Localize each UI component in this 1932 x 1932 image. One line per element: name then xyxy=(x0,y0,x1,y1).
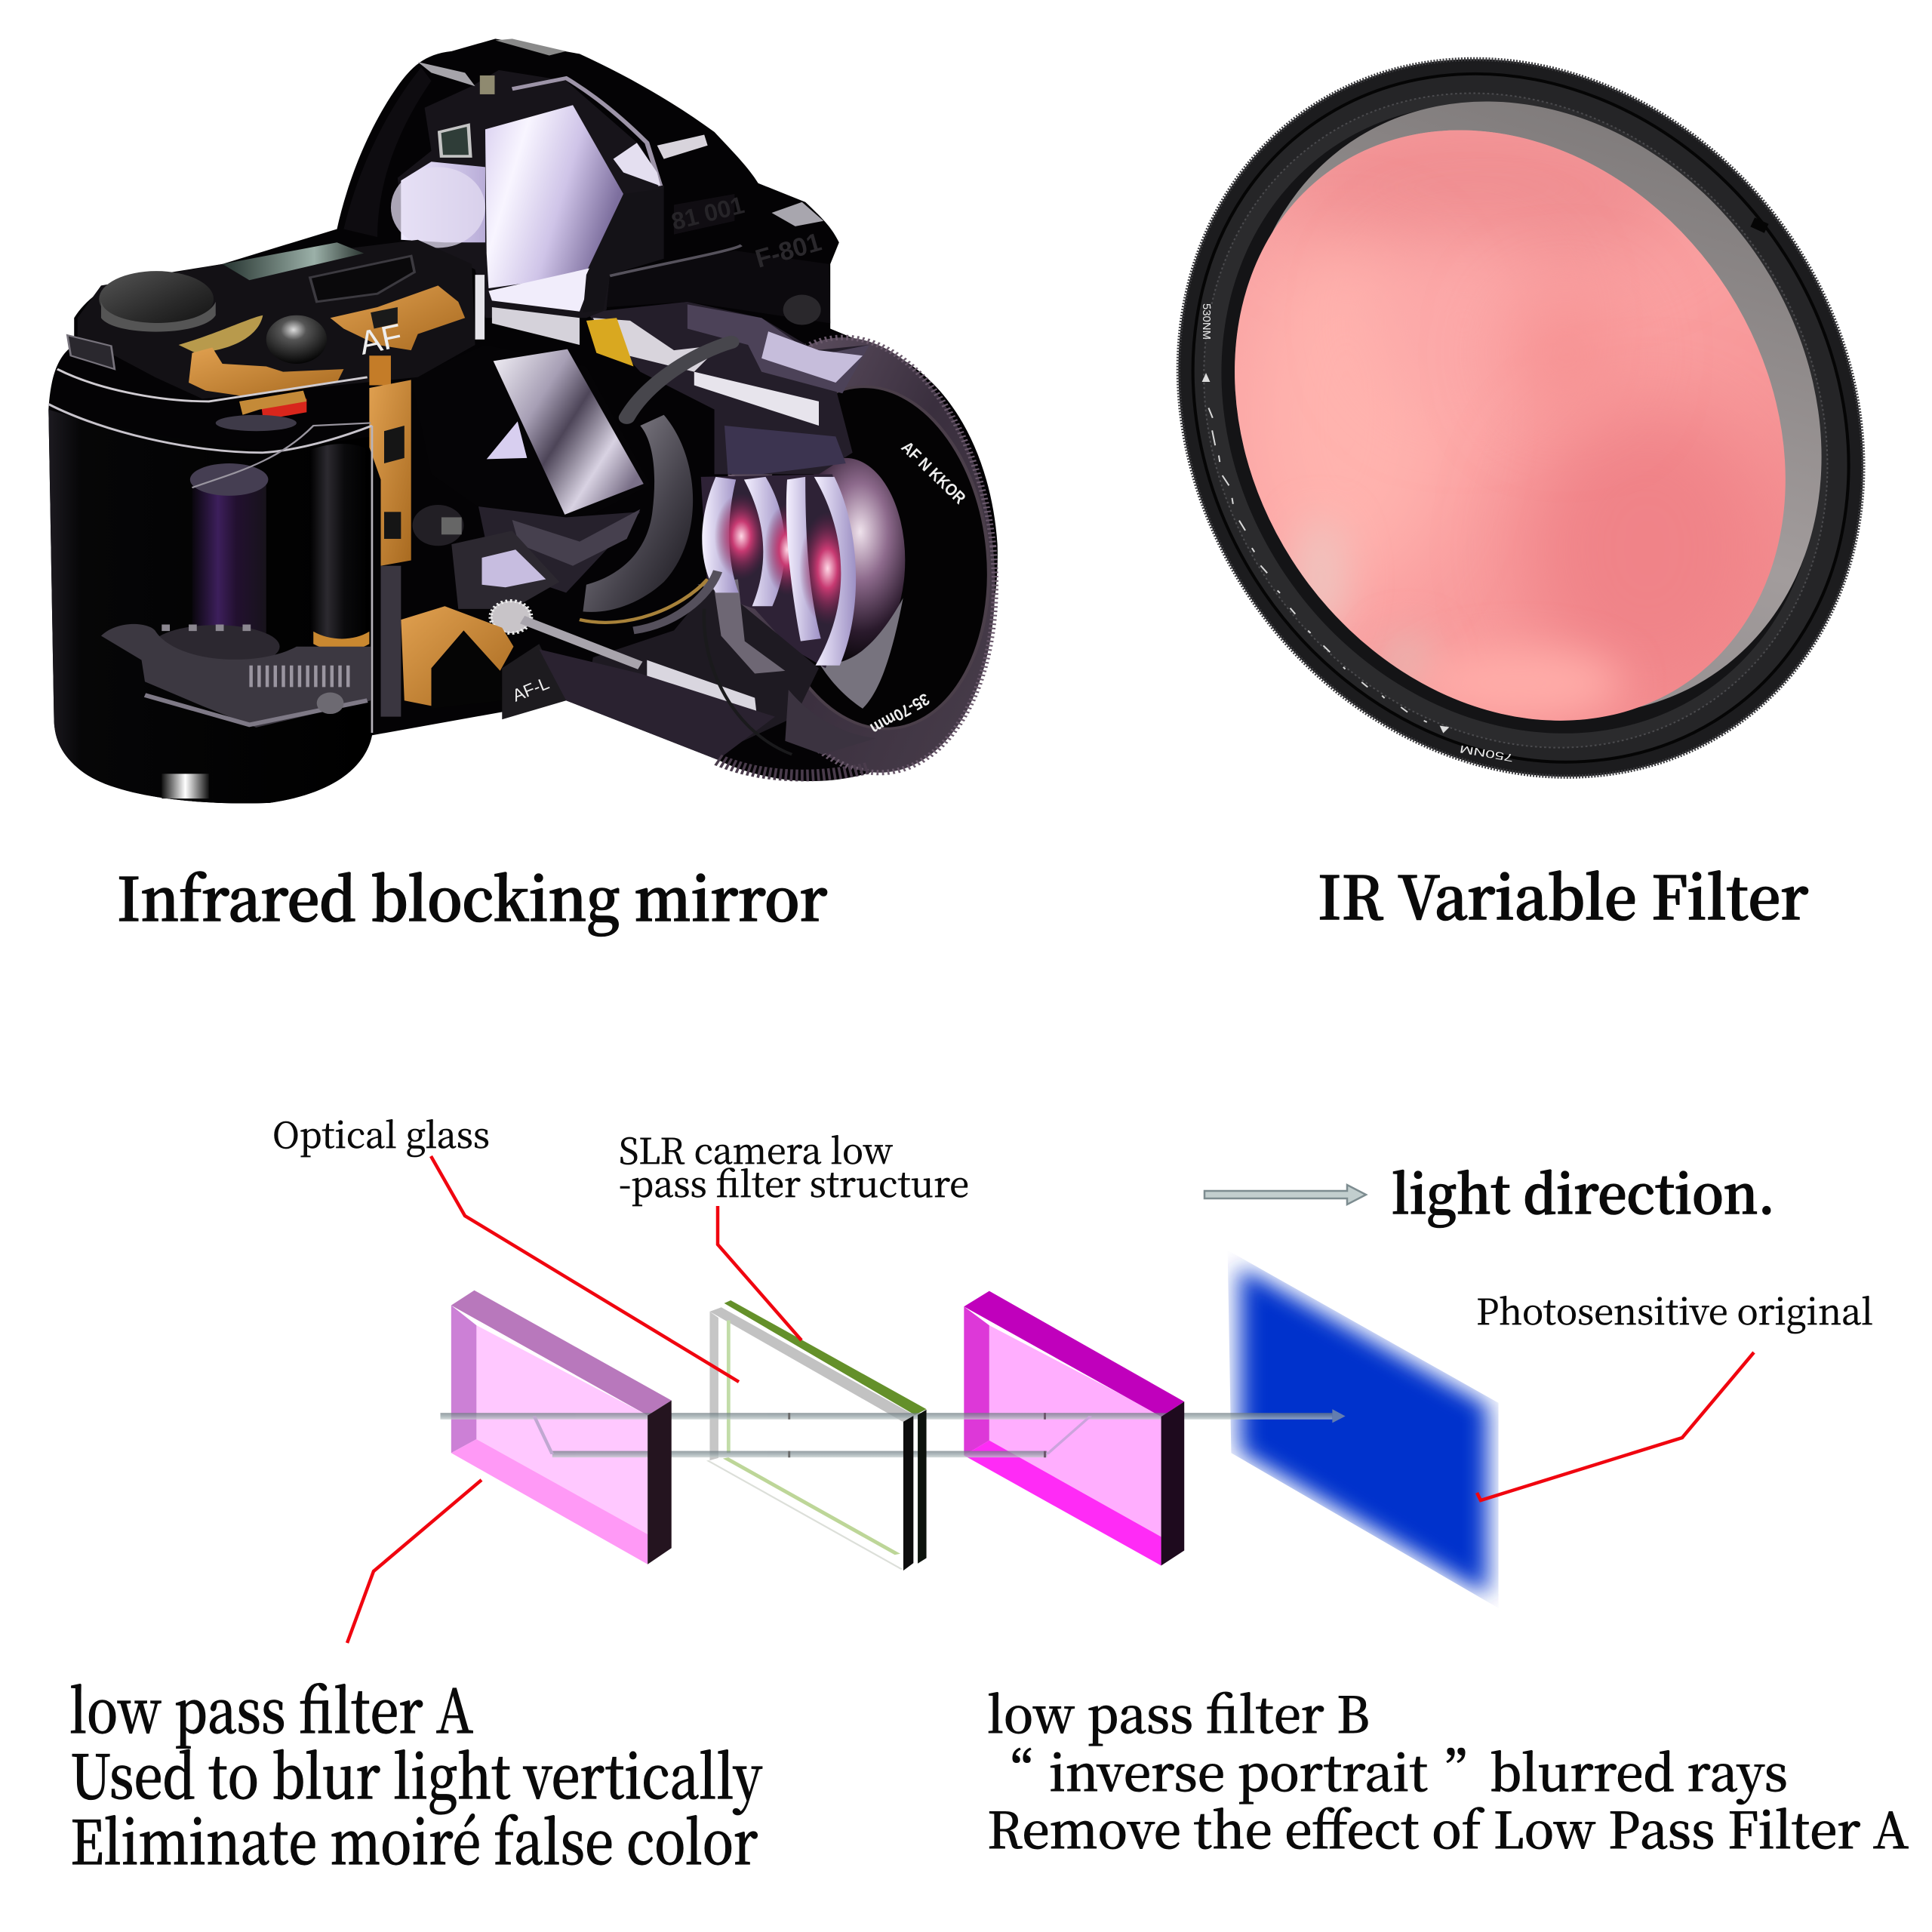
centre light tone xyxy=(1443,237,1511,295)
mirror box lower parts xyxy=(478,506,640,592)
leader: photosensitive original xyxy=(1477,1352,1754,1500)
prism underside xyxy=(492,307,580,345)
low pass filter A xyxy=(451,1291,672,1564)
lens element 4 xyxy=(814,477,856,666)
camera cutaway illustration xyxy=(48,38,1017,804)
filter marking: 530NM: 530NM xyxy=(1200,303,1213,340)
AF pad orange stem xyxy=(369,355,391,386)
white barrel strip left xyxy=(593,318,721,372)
lens element 2 xyxy=(744,477,785,606)
lens element 1 xyxy=(702,477,739,592)
ray arrow head xyxy=(1332,1409,1346,1423)
glass base xyxy=(1235,130,1786,721)
white barrel strip lower xyxy=(647,660,758,728)
heading: IR variable filter: IR Variable Filter xyxy=(1318,851,1808,937)
left dark hump shading xyxy=(343,67,432,237)
low pass filter structure diagram xyxy=(440,1266,1487,1595)
white vertical strip xyxy=(475,275,485,340)
caption: low pass filter A: Used to blur light vertically xyxy=(70,1729,762,1816)
caption: low pass filter B: low pass filter B xyxy=(987,1675,1370,1747)
filter B face xyxy=(989,1325,1161,1537)
knob on front xyxy=(413,505,463,546)
label: photosensitive original: Photosensitive original xyxy=(1476,1284,1873,1335)
camera text: AF-L: AF-L xyxy=(509,673,552,706)
pink glow 3 xyxy=(799,512,856,625)
strip black chips xyxy=(384,426,405,463)
sensor lavender xyxy=(481,549,546,587)
camera body silhouette xyxy=(48,38,998,804)
inner dark ring xyxy=(1103,0,1932,844)
photosensitive original xyxy=(1240,1266,1487,1595)
shoe screw xyxy=(480,75,494,94)
lens front black ring xyxy=(747,380,1003,735)
grip arc lines xyxy=(48,405,372,453)
light rays xyxy=(440,1409,1346,1457)
body top shoulder xyxy=(607,251,830,323)
silver rod xyxy=(522,620,640,666)
black arc band xyxy=(626,342,731,417)
yellow lens contact xyxy=(586,318,633,367)
black on PCB chip xyxy=(371,307,398,329)
filter A left edge xyxy=(451,1306,476,1453)
glass grey top edge xyxy=(709,1307,915,1422)
lower right dark tone xyxy=(1525,408,1770,688)
black arrow on pcb xyxy=(432,632,502,709)
eyepiece bulge xyxy=(391,167,485,248)
mirror box gray step xyxy=(512,509,640,566)
glass left edge xyxy=(709,1312,718,1460)
orange ring on cylinder xyxy=(313,632,369,651)
lower band xyxy=(785,690,876,755)
label: SLR camera low-pass filter structure: SLR camera low xyxy=(619,1124,894,1174)
outer black ring xyxy=(1042,0,1932,904)
vertical hairline xyxy=(371,426,373,733)
dial xyxy=(99,271,214,327)
upper lens barrel cutaway xyxy=(586,302,869,474)
lower mount gold arc xyxy=(580,580,708,623)
hot shoe xyxy=(495,38,566,56)
low pass filter B xyxy=(964,1291,1184,1565)
lower ray xyxy=(552,1451,1047,1457)
black battery cylinder xyxy=(310,444,368,652)
pink glass xyxy=(1235,130,1786,721)
label: light direction: light direction. xyxy=(1392,1152,1775,1229)
tertiary ring xyxy=(1080,0,1932,863)
glass left green line xyxy=(727,1320,731,1453)
white barrel strip xyxy=(694,372,819,426)
rear plate xyxy=(418,62,475,86)
caption: low pass filter A: Eliminate moiré false color xyxy=(70,1795,758,1881)
caption: low pass filter B: ” xyxy=(1443,1734,1493,1805)
base plate xyxy=(101,624,371,728)
upper ray xyxy=(440,1413,1332,1420)
post xyxy=(381,566,401,717)
leader: optical glass xyxy=(431,1156,739,1382)
lower barrel cutaway xyxy=(586,582,819,755)
lens retainer right xyxy=(697,580,785,673)
black hoop wire xyxy=(704,609,792,755)
battery bottom xyxy=(152,625,280,668)
grip body xyxy=(48,410,372,804)
grey glass crescent xyxy=(1128,0,1932,821)
filter A face xyxy=(476,1325,648,1534)
strip chip 2 xyxy=(384,512,401,539)
bottom left glare xyxy=(1382,633,1433,693)
gear xyxy=(491,601,531,633)
prism housing outline xyxy=(398,70,664,318)
filter B top edge xyxy=(964,1291,1184,1417)
reflex mirror xyxy=(494,349,644,515)
lens group backing xyxy=(701,474,845,668)
glass bottom thin line xyxy=(708,1460,902,1569)
knob stem xyxy=(441,517,462,534)
purple battery cylinder xyxy=(192,469,266,660)
prism lower floor xyxy=(488,266,596,312)
caption: low pass filter B: blurred rays xyxy=(1490,1734,1788,1805)
right offset xyxy=(1047,1416,1091,1454)
label: SLR camera low-pass filter structure: -pass filter structure xyxy=(619,1157,969,1208)
lens bottom knurl xyxy=(539,649,775,760)
camera text: counter: 81 001 xyxy=(669,191,747,235)
glass right edge black xyxy=(903,1416,913,1571)
red leader lines xyxy=(347,1156,1754,1643)
stepped purple barrel xyxy=(688,304,869,393)
filter A right edge xyxy=(648,1401,672,1564)
lower mount grey arc xyxy=(633,571,718,630)
sensor module xyxy=(451,531,559,609)
camera text: lens name: AF N KKOR xyxy=(898,438,970,508)
right mid tone xyxy=(1503,300,1612,395)
optical glass plate xyxy=(708,1300,927,1569)
gears xyxy=(249,661,350,691)
light direction arrow xyxy=(1204,1185,1366,1204)
teeth on battery bottom xyxy=(162,623,269,632)
bottom light tone xyxy=(1418,648,1622,718)
filter A bottom edge xyxy=(451,1439,648,1564)
camera text: AF: AF xyxy=(356,317,405,362)
pink glow 2 xyxy=(764,504,810,595)
label: optical glass: Optical glass xyxy=(272,1108,490,1158)
secondary ring xyxy=(1063,0,1932,884)
scale ticks xyxy=(1208,408,1427,722)
top darker tone xyxy=(1270,130,1677,272)
caption: low pass filter B: Remove the effect of Low Pass Filter A xyxy=(987,1791,1909,1863)
lens front glass xyxy=(786,458,905,663)
filter marking: 750NM: 750NM xyxy=(1459,743,1515,764)
IR variable filter photo xyxy=(1176,57,1866,779)
top shell rim xyxy=(512,78,660,186)
mount crescent xyxy=(583,415,693,612)
dial base xyxy=(101,302,216,332)
model text panel xyxy=(674,194,734,235)
button sphere xyxy=(266,315,327,364)
lens grey bottom wedge xyxy=(819,598,903,709)
red element xyxy=(261,398,306,418)
small lavender triangle xyxy=(487,421,527,459)
PCB lower xyxy=(401,606,513,706)
left side block xyxy=(67,335,115,369)
white barrel strip upper xyxy=(761,331,863,383)
side wheel xyxy=(783,295,821,325)
camera text: F-801: F-801 xyxy=(752,228,825,274)
vertical PCB strip xyxy=(369,380,411,566)
battery cap ellipse xyxy=(190,463,268,496)
filter B bottom edge xyxy=(964,1441,1161,1565)
pentaprism shoulder highlight xyxy=(771,202,823,226)
top right block xyxy=(310,256,414,302)
yellow pad by red xyxy=(239,391,306,415)
pin on prism hump xyxy=(657,134,708,159)
pink glow 1 xyxy=(715,493,768,580)
inner cavity xyxy=(411,345,651,517)
top deck xyxy=(78,240,475,398)
upper arc line xyxy=(57,369,368,401)
gold spring xyxy=(179,315,263,353)
bottom highlight xyxy=(162,774,209,798)
filter A top edge xyxy=(451,1291,672,1415)
viewfinder window xyxy=(439,125,470,156)
leader: filter structure xyxy=(718,1206,801,1340)
LCD xyxy=(223,242,364,280)
PCB top right xyxy=(331,285,465,350)
hinge white shape xyxy=(614,143,660,186)
mid arc line xyxy=(192,423,371,488)
pentaprism xyxy=(485,105,623,288)
filter B right edge xyxy=(1161,1401,1184,1565)
lens knurled ring xyxy=(706,328,1017,782)
AF-L button xyxy=(502,644,566,719)
triangle mark 750 xyxy=(1440,726,1449,733)
camera text: focal length: 35-70mm xyxy=(867,690,933,738)
lens element 3 xyxy=(786,477,821,641)
left light tone xyxy=(1249,243,1443,583)
glass right edge second xyxy=(918,1410,927,1564)
heading: infrared blocking mirror: Infrared blocking mirror xyxy=(117,852,827,938)
ring notch xyxy=(1750,217,1769,233)
glass bottom green band xyxy=(726,1458,897,1555)
caption: low pass filter B: inverse portrait xyxy=(1049,1734,1428,1805)
shoulder grey rim xyxy=(610,245,741,276)
glass green top edge xyxy=(724,1300,927,1415)
prism side dark xyxy=(583,189,664,312)
barrel black step xyxy=(724,426,846,474)
filter B left edge xyxy=(964,1306,989,1456)
lens bottom knurl dash xyxy=(718,760,869,776)
PCB top left xyxy=(189,348,343,396)
caption: low pass filter A: low pass filter A xyxy=(69,1663,473,1750)
triangle mark 530 xyxy=(1202,373,1210,382)
caption: low pass filter B: “ xyxy=(985,1734,1035,1805)
plate highlight xyxy=(145,695,368,724)
round parts xyxy=(317,692,343,714)
left offset xyxy=(534,1416,552,1454)
dark grey disk xyxy=(216,415,297,431)
leader: filter A xyxy=(347,1480,481,1643)
lower left glare xyxy=(1295,518,1346,638)
eyepiece lens xyxy=(401,162,485,242)
ray ticks xyxy=(789,1413,1045,1457)
